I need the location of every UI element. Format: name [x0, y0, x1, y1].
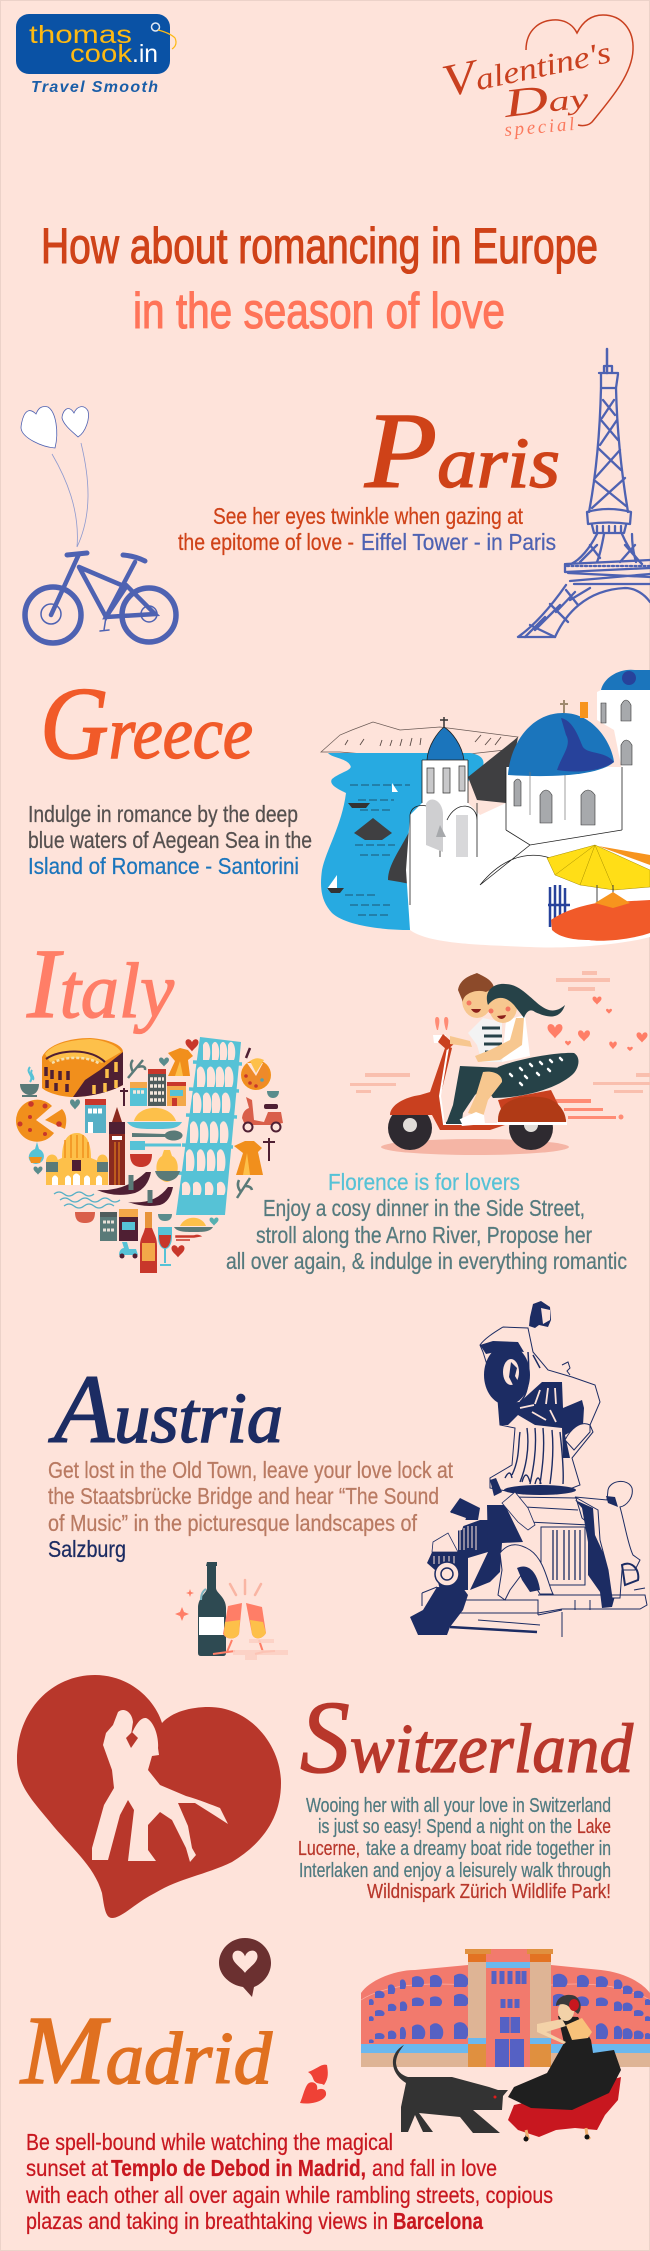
text: madrid description: Templo de Debod in Madrid,	[111, 2155, 366, 2181]
heading: madrid: Madrid	[19, 1997, 273, 2105]
icon: bicycle	[25, 553, 176, 643]
text: greece description: Island of Romance - Santorini	[28, 853, 299, 879]
text: florence description: stroll along the Arno River, Propose her	[256, 1222, 592, 1248]
icon: coffee pots	[168, 1048, 263, 1175]
badge: valentine's day special: D ay	[500, 71, 591, 126]
text: austria description	[48, 1457, 454, 1562]
panel: greece	[28, 666, 650, 948]
icon: heart with couple	[17, 1675, 281, 1918]
text: florence description: Enjoy a cosy dinner in the Side Street,	[263, 1195, 585, 1221]
text: switzerland description: Lake	[577, 1815, 611, 1838]
logo: thomas cook: cook	[70, 40, 133, 68]
text: madrid description: with each other all over again while rambling streets, copious	[25, 2182, 553, 2208]
panel: madrid	[19, 1938, 650, 2234]
heading: greece: Greece	[40, 666, 253, 781]
text: austria description: of Music” in the picturesque landscapes of	[48, 1510, 418, 1536]
text: madrid description: Be spell-bound while watching the magical	[26, 2129, 393, 2155]
text: austria description: Get lost in the Old Town, leave your love lock at	[48, 1457, 454, 1483]
text: madrid description: Barcelona	[393, 2208, 483, 2234]
text: austria description: Salzburg	[48, 1536, 126, 1562]
illustration: eiffel tower	[518, 349, 650, 637]
icon: venice tower and basilica	[46, 1107, 125, 1185]
text: florence description: Florence is for lovers	[328, 1169, 520, 1195]
icon: speech bubble heart	[219, 1938, 271, 1997]
text: austria description: the Staatsbrücke Bridge and hear “The Sound	[48, 1483, 439, 1509]
icon: gondolas and waves	[54, 1172, 173, 1208]
heading: italy: Italy	[26, 928, 174, 1039]
title	[41, 218, 598, 339]
illustration: flamenco dancer	[508, 1995, 621, 2142]
text: madrid description: sunset at	[26, 2155, 109, 2181]
heading: switzerland: Switzerland	[300, 1680, 634, 1795]
text: florence description	[226, 1169, 627, 1274]
logo: thomas cook: .in	[132, 40, 158, 68]
icon: food and tableware	[29, 1108, 183, 1182]
icon: houses	[85, 1069, 186, 1133]
illustration: santorini	[321, 670, 650, 948]
logo: thomas cook: Travel Smooth	[31, 79, 158, 96]
panel: austria	[48, 1301, 647, 1660]
text: greece description: Indulge in romance by the deep	[28, 801, 298, 827]
icon: pizza	[16, 1058, 271, 1142]
text: paris description: Eiffel Tower - in Paris	[361, 529, 556, 555]
text: switzerland description: Lucerne,	[298, 1837, 360, 1860]
icon: scooter and cups	[20, 1067, 283, 1132]
illustration: las ventas arena	[361, 1949, 650, 2067]
icon: olive sprigs and lamps	[120, 1048, 275, 1198]
icon: heart balloons	[21, 406, 89, 547]
panel: italy	[16, 928, 650, 1274]
text: paris description: See her eyes twinkle when gazing at	[213, 503, 523, 529]
text: greece description	[28, 801, 312, 879]
illustration: statue	[410, 1301, 647, 1637]
illustration: couple on scooter	[350, 971, 650, 1155]
text: greece description: blue waters of Aegean Sea in the	[28, 827, 312, 853]
text: switzerland description: is just so easy! Spend a night on the	[318, 1815, 572, 1838]
text: madrid description: and fall in love	[372, 2155, 497, 2181]
panel: switzerland	[17, 1675, 634, 1918]
illustration: italy icon heart	[16, 1037, 283, 1273]
icon: wine bottle and glasses	[175, 1562, 288, 1660]
badge: valentine's day special: special	[504, 114, 575, 141]
text: paris description: the epitome of love -	[178, 529, 354, 555]
logo: thomas cook	[16, 14, 176, 96]
icon: colosseum	[42, 1038, 123, 1097]
silhouette: dancing couple	[92, 1710, 228, 1862]
badge: valentine's day special	[437, 15, 633, 141]
text: paris description	[178, 503, 556, 555]
heading: paris: Paris	[364, 392, 560, 511]
title: in the season of love	[133, 283, 505, 339]
logo: thomas cook: thomas	[29, 21, 132, 49]
illustration: bull	[393, 2045, 508, 2133]
icon: red hearts	[300, 2065, 328, 2104]
text: madrid description	[25, 2129, 553, 2234]
text: madrid description: plazas and taking in breathtaking views in	[26, 2208, 388, 2234]
icon: bottle and glass group	[75, 1209, 213, 1273]
heading: austria: Austria	[48, 1356, 283, 1464]
text: switzerland description	[298, 1794, 611, 1903]
icon: leaning tower	[176, 1037, 242, 1215]
badge: valentine's day special: Valentine's	[437, 22, 614, 107]
panel: paris	[21, 349, 650, 643]
icon: small hearts	[34, 1039, 218, 1257]
